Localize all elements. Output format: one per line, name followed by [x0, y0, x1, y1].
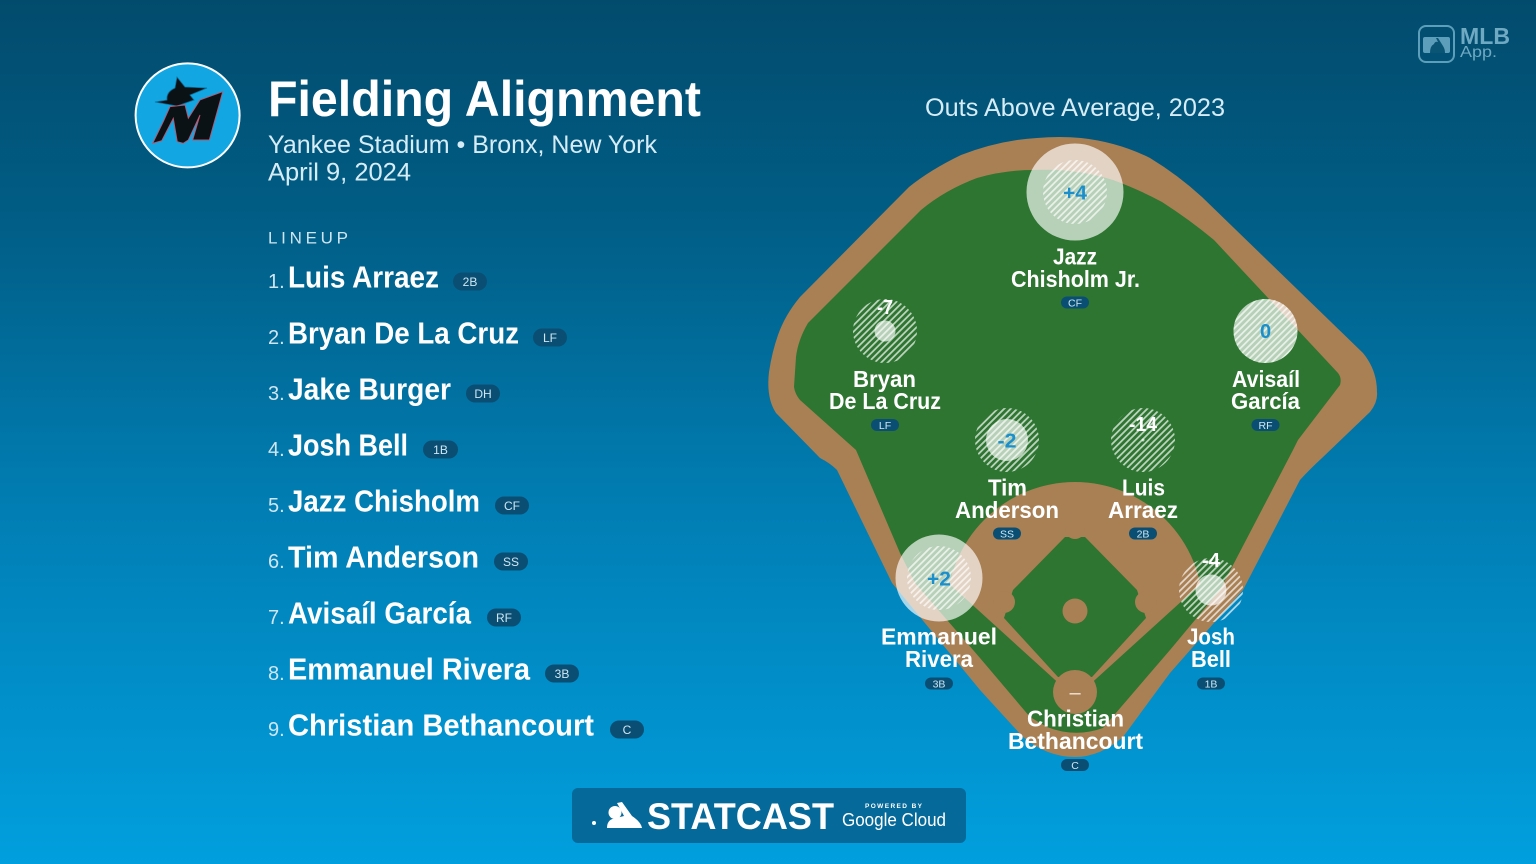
lineup row 5: CF: [504, 499, 520, 513]
lineup row 8: 3B: [555, 667, 569, 681]
statcast banner: [572, 788, 966, 843]
second base cutout: [1065, 519, 1085, 539]
subtitle: venue: Yankee Stadium • Bronx, New York: [268, 131, 657, 159]
lineup row 9: 9.: [268, 719, 285, 741]
first base cutout: [1135, 591, 1157, 613]
lineup row 2: Bryan De La Cruz: [288, 316, 519, 350]
fielder: right field: García: [1231, 388, 1300, 414]
fielder: left field: -7: [877, 297, 893, 319]
App wordmark: App.: [1460, 44, 1497, 61]
lineup row 1: Luis Arraez: [288, 260, 439, 294]
fielder: left field: LF: [879, 420, 891, 432]
fielder: first base: Bell: [1191, 646, 1231, 672]
powered by: POWERED BY: [865, 803, 923, 810]
title: Fielding Alignment: [268, 71, 701, 127]
lineup row 4: Josh Bell: [288, 428, 408, 462]
fielder: shortstop: Anderson: [955, 497, 1059, 523]
lineup row 7: Avisaíl García: [288, 596, 472, 630]
fielder: center field: +4: [1063, 182, 1088, 204]
infield grass: [1004, 537, 1146, 677]
fielder: left field: [829, 297, 941, 432]
lineup list: [268, 260, 644, 742]
subtitle: date: April 9, 2024: [268, 158, 411, 186]
fielder: catcher: C: [1071, 760, 1079, 772]
fielder: center field: Jazz: [1053, 244, 1097, 270]
icon: batter silhouette: [607, 802, 642, 828]
fielder: center field: Chisholm Jr.: [1011, 266, 1140, 292]
google cloud: Google Cloud: [842, 809, 946, 830]
lineup row 3: DH: [474, 387, 492, 401]
lineup row 4: 4.: [268, 439, 285, 461]
lineup row 6: SS: [503, 555, 519, 569]
lineup row 8: 8.: [268, 663, 285, 685]
lineup row 2: LF: [543, 331, 557, 345]
fielder: first base: -4: [1202, 550, 1221, 572]
MLB App logo: [1419, 23, 1510, 62]
fielder: left field: De La Cruz: [829, 388, 941, 414]
MLB wordmark: MLB: [1460, 23, 1510, 49]
infield dirt: [950, 482, 1200, 681]
lineup row 9: C: [623, 723, 632, 737]
lineup heading: LINEUP: [268, 228, 348, 248]
fielder: shortstop: SS: [1000, 528, 1014, 540]
fielder: catcher: –: [1069, 682, 1081, 704]
fielder: shortstop: [955, 408, 1059, 540]
lineup row 1: 2B: [463, 275, 477, 289]
fielder: catcher: [1008, 682, 1143, 772]
outfield warning track: [768, 137, 1377, 757]
fielder: right field: 0: [1260, 321, 1271, 343]
lineup row 7: 7.: [268, 607, 285, 629]
home plate circle: [1053, 670, 1097, 714]
lineup row 3: 3.: [268, 383, 285, 405]
lineup row 5: 5.: [268, 495, 285, 517]
fielder: right field: Avisaíl: [1232, 366, 1300, 392]
chart heading: Outs Above Average, 2023: [925, 94, 1225, 122]
fielder: second base: Luis: [1122, 474, 1165, 500]
icon: batter badge: [1423, 37, 1450, 53]
fielder: third base: +2: [927, 568, 951, 590]
lineup row 8: Emmanuel Rivera: [288, 652, 531, 686]
fielder: third base: Rivera: [905, 646, 973, 672]
fielder: catcher: Bethancourt: [1008, 728, 1143, 754]
fielder: third base: 3B: [933, 678, 945, 690]
banner dot: [592, 821, 596, 825]
fielder: catcher: Christian: [1027, 706, 1124, 732]
logo: Miami Marlins: [136, 63, 240, 167]
statcast wordmark: STATCAST: [647, 796, 834, 837]
lineup row 6: Tim Anderson: [288, 540, 479, 574]
lineup row 2: 2.: [268, 327, 285, 349]
fielder: first base: [1179, 550, 1243, 690]
pitcher mound: [1062, 598, 1088, 624]
lineup row 4: 1B: [433, 443, 448, 457]
grass: [794, 170, 1341, 733]
third base cutout: [993, 591, 1015, 613]
fielder: left field: Bryan: [853, 366, 916, 392]
fielder: second base: [1108, 408, 1178, 540]
fielder: third base: Emmanuel: [881, 624, 997, 650]
lineup row 1: 1.: [268, 271, 285, 293]
fielder: right field: RF: [1258, 420, 1272, 432]
baseball field: [768, 137, 1377, 757]
fielder: center field: CF: [1068, 298, 1082, 310]
fielder: second base: 2B: [1137, 528, 1149, 540]
lineup row 7: RF: [496, 611, 512, 625]
lineup row 6: 6.: [268, 551, 285, 573]
fielder: first base: 1B: [1205, 678, 1217, 690]
fielder: shortstop: Tim: [988, 474, 1027, 500]
fielder: third base: [881, 534, 997, 690]
fielder: right field: [1231, 299, 1300, 432]
fielder: center field: [1011, 144, 1140, 310]
fielder: first base: Josh: [1187, 624, 1235, 650]
lineup row 9: Christian Bethancourt: [288, 708, 594, 742]
lineup row 5: Jazz Chisholm: [288, 484, 480, 518]
lineup row 3: Jake Burger: [288, 372, 451, 406]
fielder: second base: -14: [1129, 414, 1158, 436]
fielder: second base: Arraez: [1108, 497, 1178, 523]
fielder: shortstop: -2: [998, 430, 1016, 452]
